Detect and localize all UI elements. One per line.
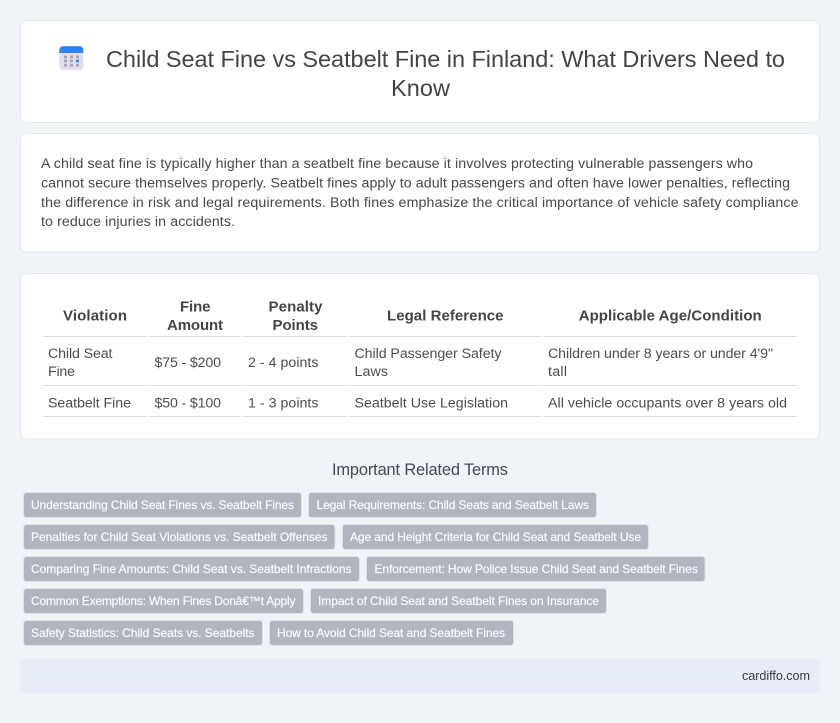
- panel: title card: [20, 20, 820, 122]
- icon: calendar: [59, 46, 83, 70]
- text block: description: the difference in risk and legal requirements. Both fines emphasize the critical importance of vehicle safety compliance: [41, 195, 799, 211]
- table row: seatbelt fine: Seatbelt Fine: [48, 395, 131, 411]
- table row: seatbelt fine: $50 - $100: [154, 395, 221, 411]
- panel: description: [20, 134, 820, 252]
- table row: child seat fine: [48, 346, 773, 380]
- tag: [308, 492, 596, 518]
- tag: [342, 524, 648, 550]
- table header: Penalty: [268, 298, 323, 315]
- panel: comparison table: [20, 274, 820, 439]
- table header: [63, 298, 762, 334]
- tag: [24, 524, 335, 550]
- table row: child seat fine: Child Seat: [48, 346, 113, 362]
- table row: seatbelt fine: Seatbelt Use Legislation: [354, 395, 508, 411]
- table header: Fine: [180, 298, 210, 315]
- text block: description: A child seat fine is typically higher than a seatbelt fine because it involves protecting vulnerable passengers who: [41, 156, 753, 172]
- tag: How to Avoid Child Seat and Seatbelt Fines: [277, 626, 505, 640]
- table row: child seat fine: tall: [548, 364, 567, 380]
- tag: [310, 588, 606, 614]
- table row: seatbelt fine: All vehicle occupants over 8 years old: [548, 395, 787, 411]
- tag: [366, 556, 705, 582]
- tag: [270, 620, 514, 646]
- heading: related terms: Important Related Terms: [332, 461, 508, 479]
- tag: Enforcement: How Police Issue Child Seat and Seatbelt Fines: [374, 562, 698, 576]
- tag: [24, 588, 304, 614]
- table row: child seat fine: Children under 8 years or under 4'9": [548, 346, 773, 362]
- tag: [24, 556, 360, 582]
- footer: [20, 659, 820, 693]
- text block: description: [41, 156, 799, 230]
- tag: Age and Height Criteria for Child Seat and Seatbelt Use: [350, 530, 641, 544]
- table row: child seat fine: $75 - $200: [154, 355, 221, 371]
- table row: seatbelt fine: 1 - 3 points: [248, 395, 318, 411]
- table row: child seat fine: Laws: [354, 364, 388, 380]
- tag: Impact of Child Seat and Seatbelt Fines on Insurance: [318, 594, 599, 608]
- text block: description: to reduce injuries in accidents.: [41, 214, 235, 230]
- table header: Violation: [63, 308, 127, 325]
- title: [106, 46, 785, 101]
- title: Child Seat Fine vs Seatbelt Fine in Finland: What Drivers Need to: [106, 46, 785, 72]
- panel: related term tags: [24, 492, 705, 646]
- table header: Applicable Age/Condition: [579, 308, 762, 325]
- tag: Penalties for Child Seat Violations vs. Seatbelt Offenses: [31, 530, 328, 544]
- tag: [24, 620, 262, 646]
- tag: Understanding Child Seat Fines vs. Seatbelt Fines: [31, 498, 294, 512]
- title: Know: [391, 75, 451, 101]
- table header: Legal Reference: [387, 308, 504, 325]
- table header: Points: [272, 317, 318, 334]
- table row: seatbelt fine: [48, 395, 787, 411]
- table row: child seat fine: Child Passenger Safety: [354, 346, 502, 362]
- tag: Safety Statistics: Child Seats vs. Seatbelts: [31, 626, 254, 640]
- tag: Comparing Fine Amounts: Child Seat vs. Seatbelt Infractions: [31, 562, 352, 576]
- tag: Common Exemptions: When Fines Donâ€™t Apply: [31, 594, 296, 608]
- footer: cardiffo.com: [742, 669, 810, 683]
- table row: child seat fine: Fine: [48, 364, 75, 380]
- tag: [24, 492, 302, 518]
- table header: Amount: [167, 317, 223, 334]
- tag: Legal Requirements: Child Seats and Seatbelt Laws: [316, 498, 589, 512]
- table row: child seat fine: 2 - 4 points: [248, 355, 318, 371]
- text block: description: cannot secure themselves properly. Seatbelt fines apply to adult passengers and often have lower penalties, reflecting: [41, 176, 790, 192]
